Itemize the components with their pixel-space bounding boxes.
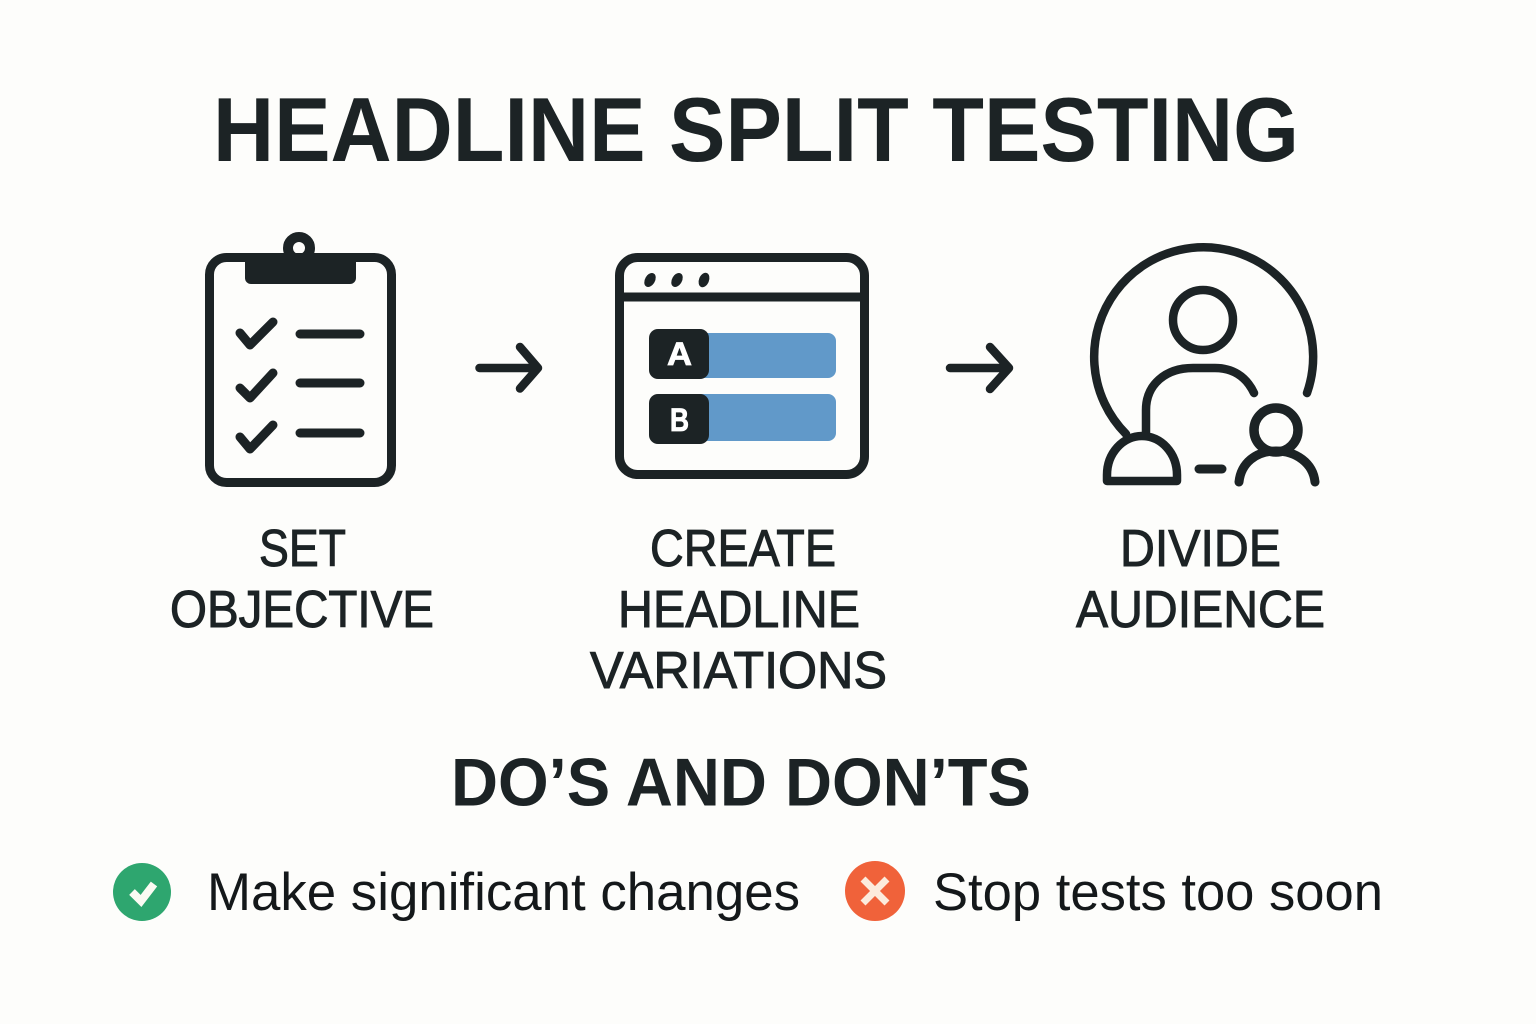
label: create headline variations: VARIATIONS (590, 642, 887, 700)
label: divide audience (1076, 520, 1325, 639)
icon: green check (113, 863, 171, 921)
label: create headline variations (590, 520, 887, 700)
title: HEADLINE SPLIT TESTING (213, 80, 1299, 181)
heading: do's and don'ts: DO’S AND DON’TS (451, 744, 1031, 820)
label: set objective: OBJECTIVE (170, 581, 434, 639)
icon: red cross (845, 861, 905, 921)
icon: browser window with A/B variations (620, 258, 864, 474)
label: set objective (170, 520, 434, 639)
label: divide audience: AUDIENCE (1076, 581, 1325, 639)
label: divide audience: DIVIDE (1120, 520, 1281, 578)
icon: browser window with A/B variations: B (670, 402, 689, 438)
text: do item: Make significant changes (207, 863, 800, 922)
arrow: variations to audience (950, 347, 1009, 389)
label: set objective: SET (259, 520, 346, 578)
icon: clipboard checklist (210, 237, 392, 482)
text: don't item: Stop tests too soon (933, 863, 1383, 922)
arrow: objective to variations (480, 347, 538, 388)
icon: divided audience (1094, 247, 1315, 482)
label: create headline variations: HEADLINE (618, 581, 860, 639)
icon: browser window with A/B variations: A (667, 336, 692, 372)
label: create headline variations: CREATE (650, 520, 836, 578)
